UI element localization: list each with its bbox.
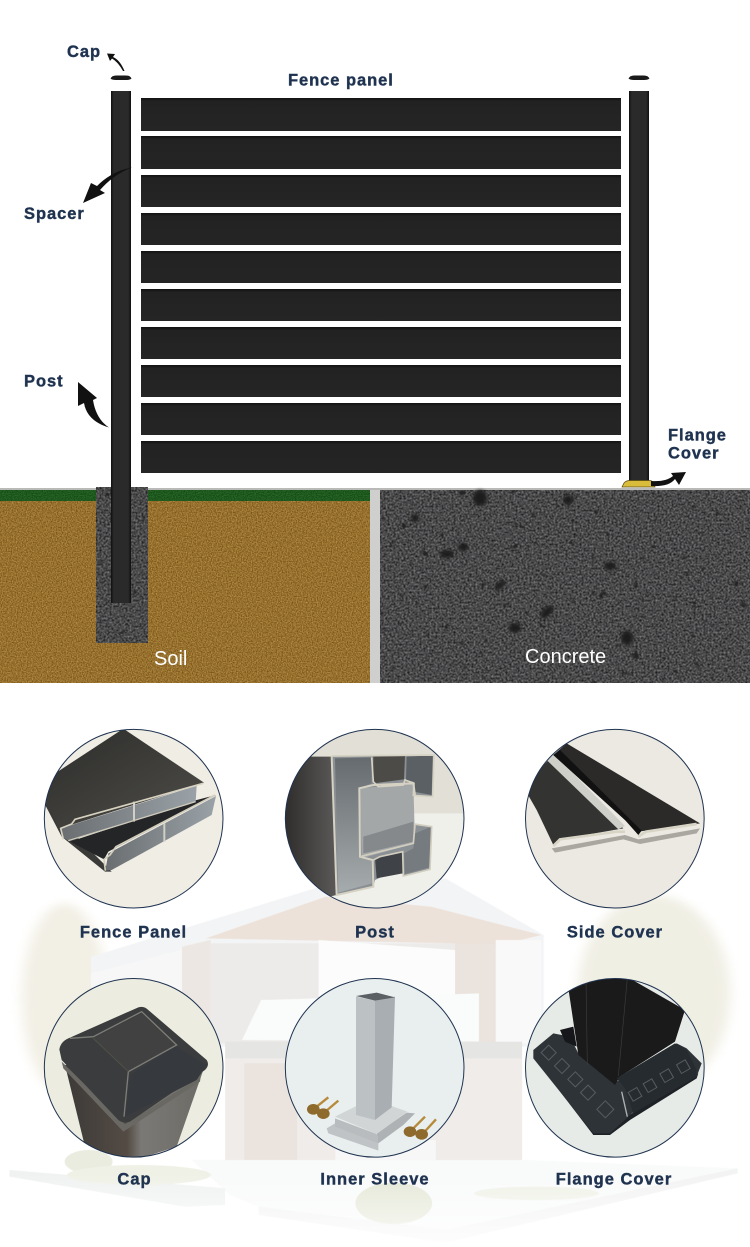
caption: Post: Post [355, 924, 395, 942]
concrete footing [96, 487, 148, 643]
component: Cap photo [40, 975, 227, 1162]
label: Post: Post [24, 372, 64, 390]
left post cap [110, 76, 132, 80]
arrow: post [78, 382, 109, 428]
caption: Side Cover: Side Cover [567, 924, 663, 942]
component: Fence Panel photo [40, 727, 227, 913]
label: Flange Cover: Flange [668, 426, 727, 444]
concrete panel [380, 490, 750, 683]
label: Concrete: Concrete [525, 646, 606, 668]
component: Post photo [283, 727, 470, 913]
caption: Flange Cover: Flange Cover [556, 1170, 672, 1188]
right post [629, 91, 649, 484]
flange cover [622, 480, 655, 487]
left post [111, 91, 131, 603]
caption: Cap: Cap [117, 1170, 152, 1188]
arrow: cap [107, 54, 124, 71]
right post cap [628, 76, 650, 80]
label: Spacer: Spacer [24, 205, 85, 223]
background: faded house illustration [10, 878, 738, 1243]
soil panel [0, 490, 370, 683]
fade at bottom of background [0, 1170, 750, 1247]
divider between ground types [370, 490, 380, 683]
component: Side Cover photo [523, 727, 710, 913]
fence panel slats [141, 98, 621, 473]
ground line [0, 488, 750, 491]
label: Soil: Soil [154, 648, 187, 670]
fence diagram [0, 43, 750, 683]
label: Cap: Cap [67, 43, 101, 61]
arrow: flange cover [651, 472, 686, 486]
label: Fence panel: Fence panel [288, 72, 394, 90]
arrow: spacer [83, 168, 132, 203]
component: Flange Cover photo [523, 977, 710, 1163]
caption: Inner Sleeve: Inner Sleeve [320, 1170, 430, 1188]
label: Flange Cover: Cover [668, 444, 720, 462]
component: Inner Sleeve photo [283, 977, 470, 1163]
caption: Fence Panel: Fence Panel [80, 924, 187, 942]
